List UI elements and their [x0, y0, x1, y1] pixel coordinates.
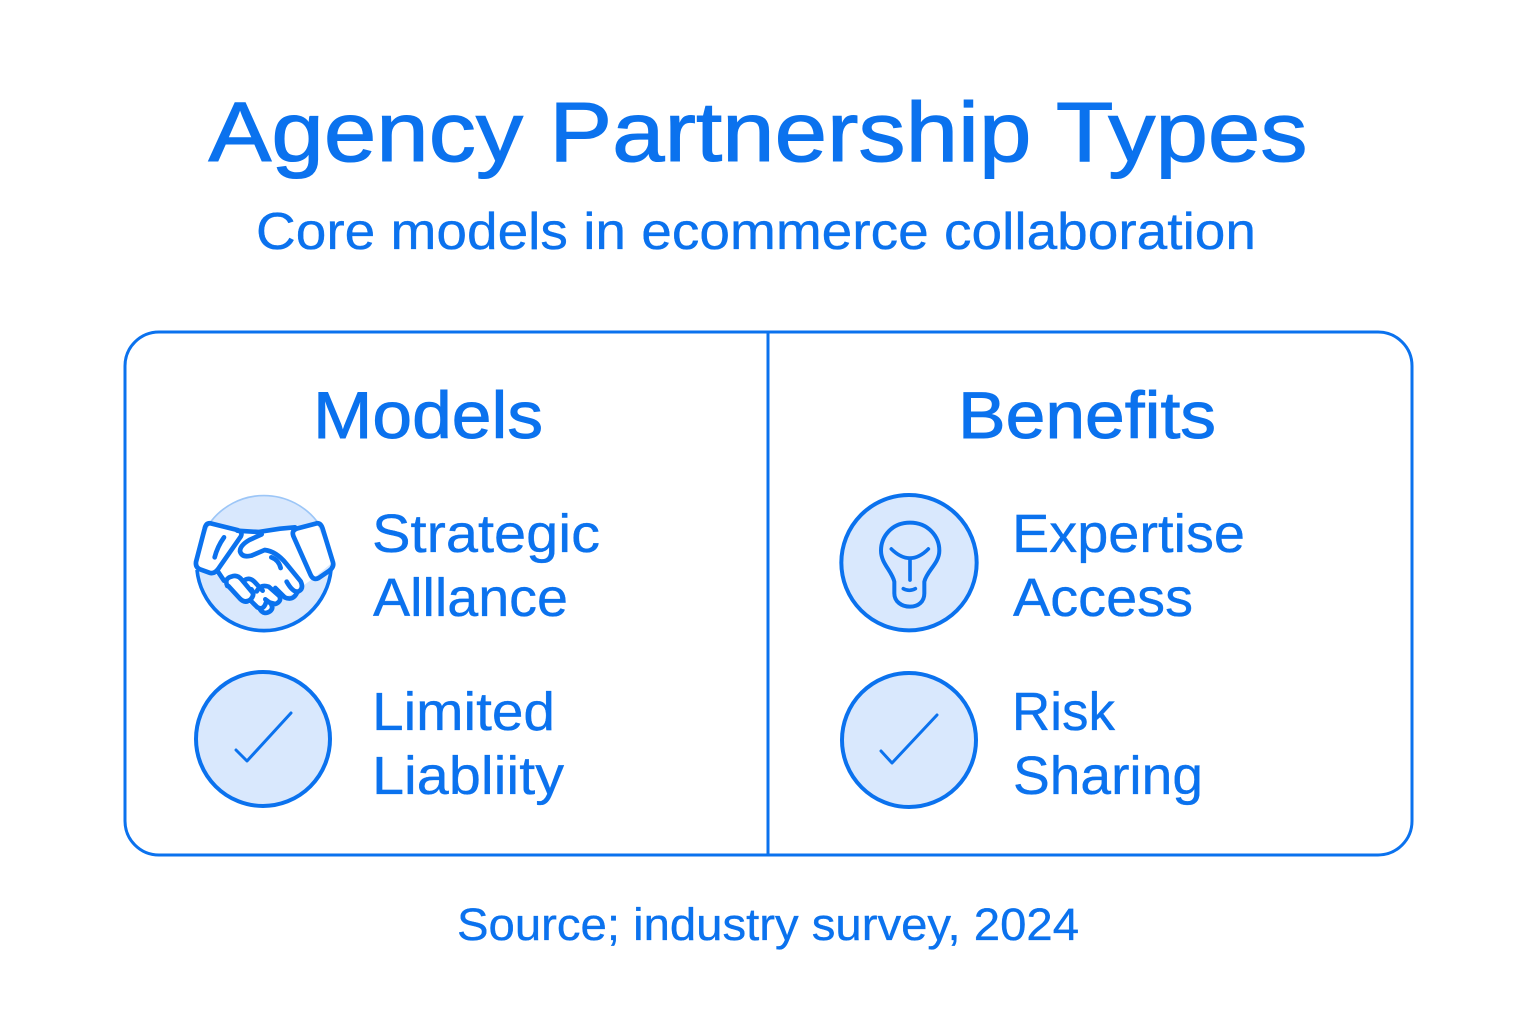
- icon: light bulb: [841, 495, 977, 630]
- label: limited liability: [372, 682, 564, 806]
- icon: check circle risk sharing: [842, 673, 976, 807]
- label: strategic alliance: [372, 504, 600, 628]
- label: risk sharing: [1012, 682, 1203, 806]
- label: limited liability: Liabliity: [372, 746, 564, 806]
- heading: models: Models: [313, 378, 543, 452]
- label: strategic alliance: Strategic: [372, 504, 600, 564]
- heading: benefits: Benefits: [958, 378, 1216, 452]
- label: expertise access: Expertise: [1012, 504, 1245, 564]
- icon: handshake: [195, 495, 333, 631]
- icon: check circle limited liability: [196, 672, 330, 806]
- panel: models: [195, 378, 600, 806]
- label: risk sharing: Sharing: [1013, 746, 1203, 806]
- title: Agency Partnership Types: [208, 85, 1308, 179]
- label: limited liability: Limited: [372, 682, 555, 742]
- label: risk sharing: Risk: [1012, 682, 1116, 742]
- panel: main two-column frame: [125, 332, 1412, 855]
- label: expertise access: [1012, 504, 1245, 628]
- label: expertise access: Access: [1013, 568, 1193, 628]
- panel: benefits: [841, 378, 1245, 807]
- subtitle: Core models in ecommerce collaboration: [256, 203, 1256, 261]
- label: strategic alliance: Alllance: [373, 568, 568, 628]
- source note: Source; industry survey, 2024: [457, 899, 1079, 950]
